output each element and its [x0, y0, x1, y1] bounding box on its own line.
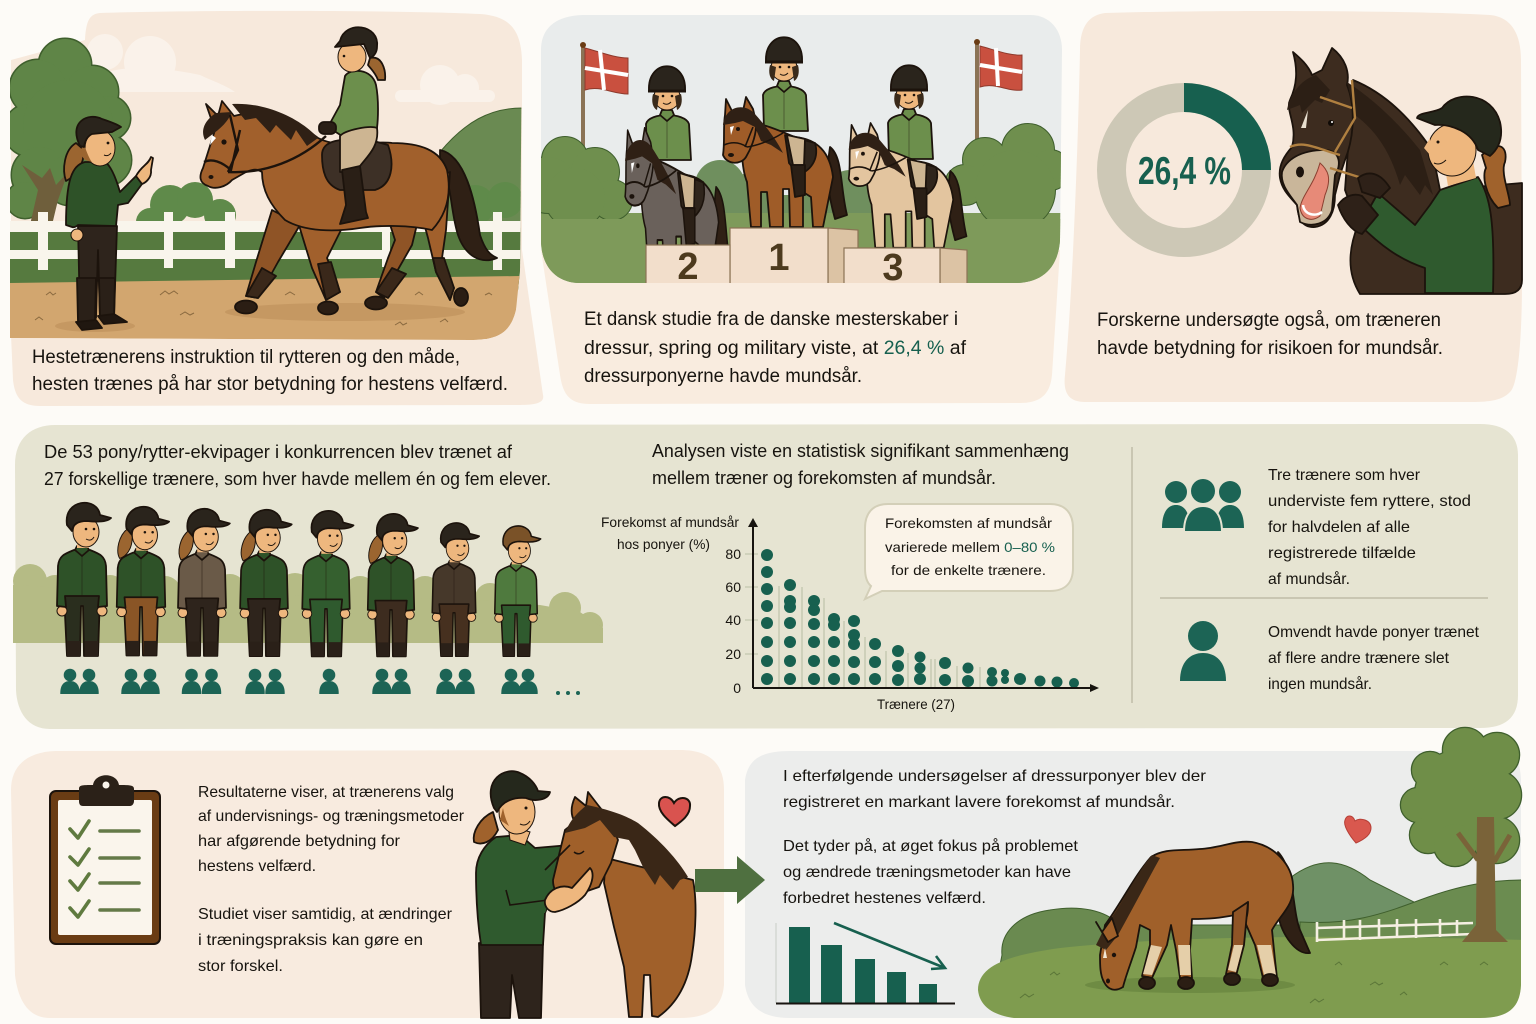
- dot chart: prevalence per trainer: 0: [733, 680, 741, 696]
- student icons: [60, 669, 580, 695]
- icon: clipboard checklist: [50, 775, 160, 944]
- dot chart: prevalence per trainer: 60: [725, 579, 741, 595]
- donut chart: 26,4 %: [1112, 98, 1256, 242]
- text: caption: Hestetrænerens instruktion til rytteren og den måde,: [32, 347, 460, 368]
- text: three trainers: registrerede tilfælde: [1268, 545, 1416, 562]
- illustration: trainer with horse: [474, 771, 696, 1018]
- pony: palomino with rider: [849, 65, 966, 248]
- text: results: hestens velfærd.: [198, 858, 316, 875]
- dot chart: prevalence per trainer: 40: [725, 612, 741, 628]
- illustration: trainer pointing: [64, 117, 153, 330]
- text: results: Resultaterne viser, at trænerens valg: [198, 784, 454, 801]
- text: study finding: dressur, spring og military viste, at 26,4 % af: [584, 338, 967, 359]
- text: trainers intro: De 53 pony/rytter-ekvipager i konkurrencen blev trænet af: [44, 442, 513, 462]
- icon: single person: [1180, 621, 1226, 681]
- illustration: podium scene: 2: [677, 246, 699, 288]
- text: results: har afgørende betydning for: [198, 833, 401, 850]
- text: other trainers: af flere andre trænere slet: [1268, 650, 1450, 667]
- text: three trainers: af mundsår.: [1268, 570, 1350, 588]
- trainers row: [57, 503, 541, 656]
- podium: [646, 228, 967, 290]
- text: caption: [32, 347, 508, 395]
- pony: brown with rider: [723, 37, 847, 227]
- illustration: horse with rider: [200, 27, 497, 314]
- text: analysis heading: Analysen viste en statistisk signifikant sammenhæng: [652, 441, 1069, 461]
- illustration: grazing horse on hill: [978, 728, 1525, 1020]
- dot chart: prevalence per trainer: hos ponyer (%): [617, 536, 710, 552]
- illustration: podium scene: 1: [768, 237, 790, 279]
- text: analysis heading: mellem træner og forekomsten af mundsår.: [652, 468, 996, 488]
- text: follow-up studies: registreret en markant lavere forekomst af mundsår.: [783, 793, 1175, 811]
- callout: prevalence range: varierede mellem 0–80 %: [885, 539, 1055, 555]
- hedge background: [13, 564, 603, 643]
- text: analysis heading: [652, 441, 1069, 488]
- dot chart: prevalence per trainer: 80: [725, 546, 741, 562]
- text: results: stor forskel.: [198, 958, 283, 975]
- text: caption: hesten trænes på har stor betydning for hestens velfærd.: [32, 374, 508, 395]
- text: researchers question: havde betydning for risikoen for mundsår.: [1097, 338, 1443, 359]
- text: study finding: dressurponyerne havde mundsår.: [584, 366, 862, 387]
- text: results: i træningspraksis kan gøre en: [198, 932, 423, 949]
- illustration: riding arena scene: [4, 34, 523, 340]
- panel: Danish championship study: [520, 15, 1070, 404]
- text: three trainers: Tre trænere som hver: [1268, 467, 1421, 484]
- panel: follow-up improvement: [745, 728, 1525, 1020]
- text: follow-up studies: og ændrede træningsmetoder kan have: [783, 864, 1071, 881]
- dot chart: prevalence per trainer: Trænere (27): [877, 696, 955, 712]
- text: other trainers: [1268, 624, 1480, 693]
- text: other trainers: Omvendt havde ponyer trænet: [1268, 624, 1480, 641]
- illustration: podium scene: 3: [882, 247, 904, 289]
- dot chart: prevalence per trainer: 20: [725, 646, 741, 662]
- text: follow-up studies: Det tyder på, at øget fokus på problemet: [783, 837, 1079, 855]
- text: results: Studiet viser samtidig, at ændringer: [198, 906, 453, 923]
- illustration: horse mouth being inspected: [1280, 48, 1522, 294]
- text: researchers question: [1097, 310, 1443, 359]
- panel: trainer instruction: [4, 11, 543, 406]
- dot chart: prevalence per trainer: Forekomst af mundsår: [601, 514, 739, 530]
- callout: prevalence range: for de enkelte trænere.: [891, 562, 1046, 578]
- text: trainers intro: [44, 442, 551, 489]
- text: researchers question: Forskerne undersøgte også, om træneren: [1097, 310, 1441, 331]
- text: follow-up studies: [783, 768, 1207, 907]
- icon: heart: [659, 797, 690, 826]
- text: follow-up studies: forbedret hestenes velfærd.: [783, 890, 986, 907]
- dot chart: prevalence per trainer: [601, 514, 1099, 712]
- text: trainers intro: 27 forskellige trænere, som hver havde mellem én og fem elever.: [44, 469, 551, 489]
- text: three trainers: underviste fem ryttere, stod: [1268, 493, 1471, 510]
- text: study finding: [584, 309, 967, 387]
- pony: grey with rider: [624, 65, 728, 244]
- illustration: podium scene: [520, 15, 1070, 290]
- icon: three people: [1162, 479, 1244, 532]
- text: follow-up studies: I efterfølgende undersøgelser af dressurponyer blev der: [783, 768, 1207, 785]
- arrow: results to follow-up: [695, 856, 765, 904]
- text: three trainers: for halvdelen af alle: [1268, 519, 1410, 536]
- panel: results: [11, 750, 724, 1018]
- text: study finding: Et dansk studie fra de danske mesterskaber i: [584, 309, 958, 330]
- bar chart: declining prevalence: [776, 923, 955, 1004]
- panel: mouth sores statistic: [1065, 11, 1522, 402]
- callout: prevalence range: [865, 504, 1073, 599]
- donut chart: 26,4 %: 26,4 %: [1138, 150, 1231, 193]
- callout: prevalence range: Forekomsten af mundsår: [885, 515, 1052, 531]
- text: three trainers: [1268, 467, 1471, 588]
- panel: trainers and analysis: [13, 424, 1518, 729]
- text: results: af undervisnings- og træningsmetoder: [198, 808, 465, 825]
- text: results: [198, 784, 465, 975]
- text: other trainers: ingen mundsår.: [1268, 675, 1372, 693]
- icon: heart: [1345, 816, 1371, 843]
